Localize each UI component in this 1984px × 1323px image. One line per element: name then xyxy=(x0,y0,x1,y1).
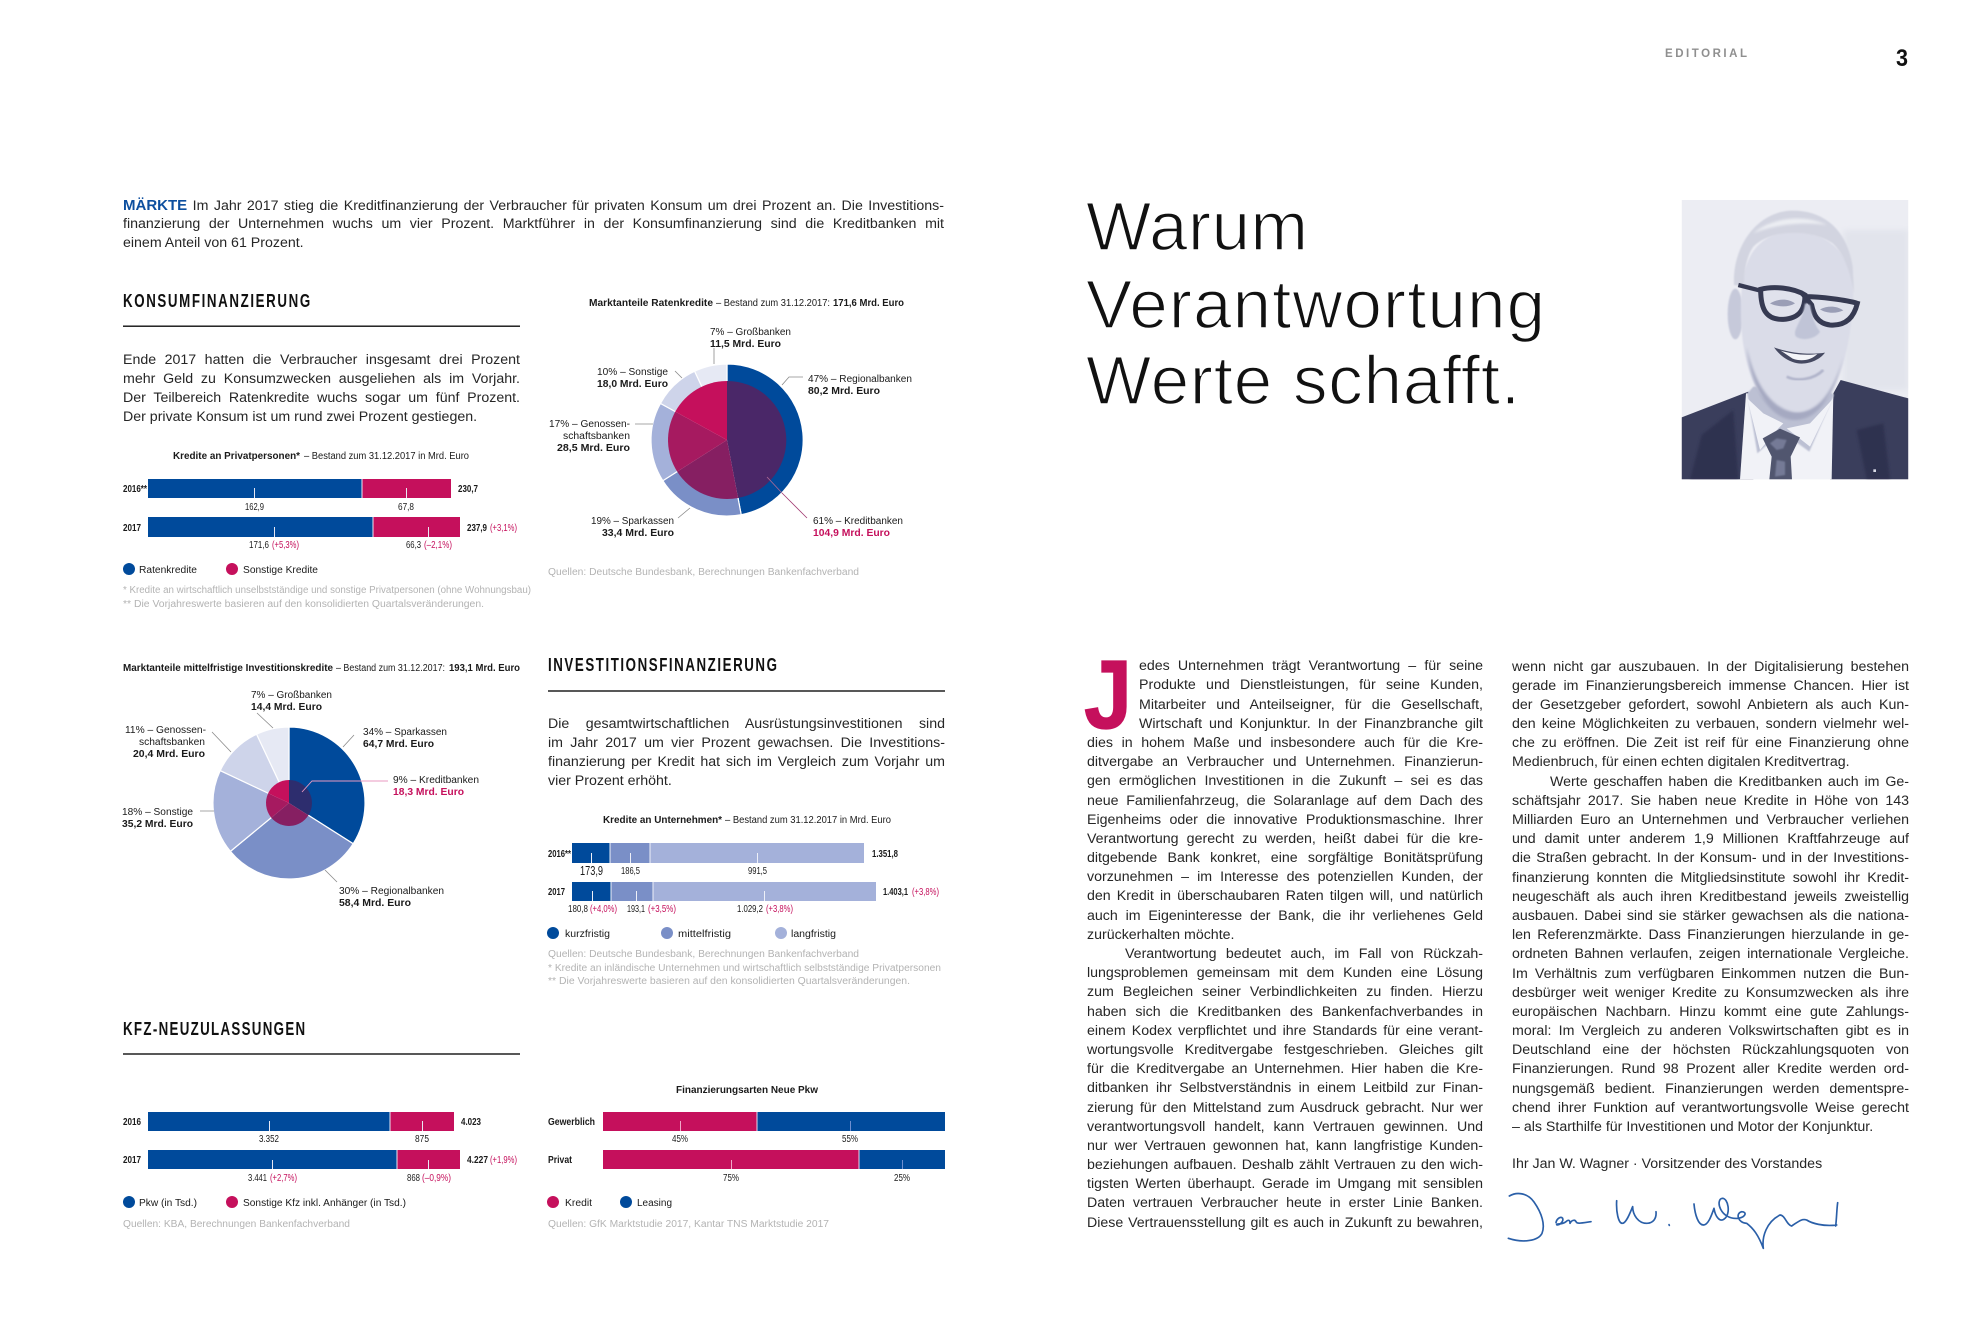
bar chart: Finanzierungsarten Neue Pkw: 75% xyxy=(723,1173,739,1184)
bar chart: Kredite an Unternehmen: (+3,8%) xyxy=(766,904,793,915)
bar chart: Kredite an Unternehmen: 173,9 xyxy=(580,864,603,878)
bar chart: Kredite an Privatpersonen: – Bestand zum 31.12.2017 in Mrd. Euro xyxy=(304,451,469,462)
pie chart: Marktanteile Ratenkredite: 61% – Kreditbanken xyxy=(813,516,903,527)
bar chart: Finanzierungsarten Neue Pkw xyxy=(547,1085,945,1230)
bar chart: Kredite an Privatpersonen: Sonstige Kredite xyxy=(243,565,318,576)
pie chart: Marktanteile mittelfristige Investitionskredite: – Bestand zum 31.12.2017: xyxy=(336,663,445,674)
bar chart: Kredite an Privatpersonen: 230,7 xyxy=(458,484,478,495)
article column 2: Werte geschaffen haben die Kreditbanken auch im Ge- xyxy=(1550,774,1909,790)
text block: Investitionsfinanzierung: finanzierung per Kredit hat sich im Vergleich zum Vorjahr um xyxy=(548,754,945,770)
pie chart: Marktanteile mittelfristige Investitionskredite: Marktanteile mittelfristige Investitionskredite xyxy=(123,663,333,674)
bar chart: Finanzierungsarten Neue Pkw: 55% xyxy=(842,1134,858,1145)
intro text: Märkte: einem Anteil von 61 Prozent. xyxy=(123,235,304,251)
article column 2: schäftsjahr 2017. Sie haben neue Kredite in Höhe von 143 xyxy=(1512,793,1909,809)
article column 2: finanzierung konnten die Mitgliedsinstitute sowohl ihr Kredit- xyxy=(1512,870,1909,886)
article column 1: lungsproblemen gemeinsam mit dem Kunden eine Lösung xyxy=(1087,965,1483,981)
intro text: Märkte: MÄRKTE Im Jahr 2017 stieg die Kreditfinanzierung der Verbraucher für privaten Konsum um drei Prozent an. Die Investitions- xyxy=(123,197,944,214)
article column 2: der Gesetzgeber gefordert, sowohl Anbietern als auch Kun- xyxy=(1512,697,1909,713)
bar chart: Kredite an Unternehmen: 2016** xyxy=(548,849,571,860)
article column 1: zurückerhalten möchte. xyxy=(1087,927,1234,943)
bar chart: Kredite an Unternehmen: 193,1 xyxy=(627,904,645,915)
bar chart: Kfz-Neuzulassungen xyxy=(123,1112,517,1230)
article column 2: len Referenzmärkte. Dass Finanzierungen hierzulande in ge- xyxy=(1512,927,1909,943)
article column 1: neue Familienfahrzeug, die Solaranlage auf dem Dach des xyxy=(1087,792,1483,808)
bar chart: Kredite an Unternehmen: – Bestand zum 31.12.2017 in Mrd. Euro xyxy=(725,815,891,826)
pie chart: Marktanteile mittelfristige Investitionskredite: 18,3 Mrd. Euro xyxy=(393,787,464,798)
bar chart: Kredite an Unternehmen: (+4,0%) xyxy=(590,904,617,915)
pie chart: Marktanteile mittelfristige Investitionskredite: schaftsbanken xyxy=(139,737,205,748)
article column 2: moral: Im Vergleich zu anderen Volkswirtschaften gibt es in xyxy=(1512,1023,1909,1039)
bar chart: Kfz-Neuzulassungen: (+1,9%) xyxy=(490,1155,517,1166)
article column 1: verantwortungsvoll handelt, kann Vertrauen gewinnen. Und xyxy=(1087,1119,1483,1135)
article column 1: vorzunehmen – im Interesse des potenziellen Kunden, der xyxy=(1087,869,1483,885)
article column 1: ditgebende Bank konkret, eine sorgfältige Bonitätsprüfung xyxy=(1087,850,1483,866)
text block: Investitionsfinanzierung: im Jahr 2017 um vier Prozent gewachsen. Die Investitions- xyxy=(548,735,945,751)
pie chart: Marktanteile Ratenkredite: 10% – Sonstige xyxy=(597,367,668,378)
bar chart: Kfz-Neuzulassungen: 3.352 xyxy=(259,1134,279,1145)
bar chart: Kredite an Unternehmen xyxy=(547,815,941,987)
article column 2: Deutschland eine der höchsten Rückzahlungsquoten von xyxy=(1512,1042,1909,1058)
pie chart: Marktanteile Ratenkredite: 7% – Großbanken xyxy=(710,327,791,338)
bar chart: Finanzierungsarten Neue Pkw: Finanzierungsarten Neue Pkw xyxy=(676,1085,818,1096)
article column 2: nungsgemäß bedient. Finanzierungen werden dementspre- xyxy=(1512,1081,1909,1097)
page header: section label: EDITORIAL xyxy=(1665,48,1747,60)
pie chart: Marktanteile Ratenkredite: Quellen: Deutsche Bundesbank, Berechnungen Bankenfachverband xyxy=(548,567,859,578)
text block: Konsumfinanzierung: mehr Geld zu Konsumzwecken ausgeliehen als im Vorjahr. xyxy=(123,371,520,387)
article column 1: Wirtschaft und Konjunktur. In der Finanzbranche gilt xyxy=(1139,716,1483,732)
bar chart: Kfz-Neuzulassungen: (+2,7%) xyxy=(270,1173,297,1184)
bar chart: Kredite an Privatpersonen: 2016** xyxy=(123,484,147,495)
article column 2: den keine Möglichkeiten zu verbauen, sondern vielmehr wel- xyxy=(1512,716,1909,732)
article column 1: Diese Vertrauensstellung gilt es auch in Zukunft zu bewahren, xyxy=(1087,1215,1483,1231)
drop cap J: J xyxy=(1084,640,1132,749)
article column 2: chend ihrer Funktion auf verantwortungsvolle Weise gerecht xyxy=(1512,1100,1909,1116)
text block: Konsumfinanzierung: Der private Konsum ist um rund zwei Prozent gestiegen. xyxy=(123,409,477,425)
article column 2: wenn nicht gar auszubauen. In der Digitalisierung bestehen xyxy=(1512,658,1909,674)
bar chart: Kredite an Privatpersonen: 67,8 xyxy=(398,502,414,513)
text block: Investitionsfinanzierung xyxy=(548,716,945,789)
bar chart: Kredite an Privatpersonen: 2017 xyxy=(123,523,141,534)
bar chart: Kredite an Privatpersonen: (+5,3%) xyxy=(272,540,299,551)
bar chart: Kredite an Unternehmen: kurzfristig xyxy=(565,929,610,940)
bar chart: Finanzierungsarten Neue Pkw: 25% xyxy=(894,1173,910,1184)
bar chart: Kredite an Unternehmen: 991,5 xyxy=(748,866,767,877)
article column 2: neugeschäft als auch ihren Kreditbestand jeweils zweistellig xyxy=(1512,889,1909,905)
text block: Konsumfinanzierung xyxy=(123,352,520,425)
article column 1: auch im Eigeninteresse der Bank, die ihr verliehenes Geld xyxy=(1087,908,1483,924)
main title: Verantwortung xyxy=(1086,266,1545,343)
bar chart: Kredite an Privatpersonen: 237,9 xyxy=(467,523,487,534)
sign-off line: Ihr Jan W. Wagner · Vorsitzender des Vorstandes xyxy=(1512,1156,1822,1172)
article column 2: und damit unter anderem 1,9 Millionen Kraftfahrzeuge auf xyxy=(1512,831,1909,847)
pie chart: Marktanteile mittelfristige Investitionskredite: 18% – Sonstige xyxy=(122,807,193,818)
article column 1: Verantwortung bedeutet auch, im Fall von Rückzah- xyxy=(1125,946,1483,962)
article column 1: Produkte und Dienstleistungen, für seine Kunden, xyxy=(1139,677,1483,693)
bar chart: Kredite an Unternehmen: 186,5 xyxy=(621,866,640,877)
bar chart: Kredite an Privatpersonen: 171,6 xyxy=(249,540,269,551)
bar chart: Kredite an Unternehmen: 180,8 xyxy=(568,904,588,915)
article column 1: einem Kodex verpflichtet und ihre Standards für eine verant- xyxy=(1087,1023,1483,1039)
article column 1: tigsten Werten überhaupt. Gerade im Umgang mit sensiblen xyxy=(1087,1176,1483,1192)
article column 1: Verantwortung gerecht zu werden, heißt dabei für die kre- xyxy=(1087,831,1483,847)
pie chart: Marktanteile mittelfristige Investitionskredite: 64,7 Mrd. Euro xyxy=(363,739,434,750)
pie chart: Marktanteile mittelfristige Investitionskredite: 58,4 Mrd. Euro xyxy=(339,898,411,909)
pie chart: Marktanteile mittelfristige Investitionskredite xyxy=(122,663,520,909)
article column 1: zierung für den Mittelstand zum Ausdruck gebracht. Nur wer xyxy=(1087,1100,1483,1116)
heading: Konsumfinanzierung: KONSUMFINANZIERUNG xyxy=(123,291,310,312)
bar chart: Kfz-Neuzulassungen: Pkw (in Tsd.) xyxy=(139,1198,197,1209)
pie chart: Marktanteile mittelfristige Investitionskredite: 193,1 Mrd. Euro xyxy=(449,663,520,674)
bar chart: Finanzierungsarten Neue Pkw: Kredit xyxy=(565,1198,592,1209)
pie chart: Marktanteile Ratenkredite: 80,2 Mrd. Euro xyxy=(808,386,880,397)
article column 1: ditvergabe an Verbraucher und Unternehmen. Finanzierun- xyxy=(1087,754,1483,770)
bar chart: Kredite an Unternehmen: (+3,5%) xyxy=(648,904,676,915)
article column 1: Daten vertrauen Verbraucher heute in erster Linie Banken. xyxy=(1087,1195,1483,1211)
bar chart: Kredite an Unternehmen: 1.029,2 xyxy=(737,904,763,915)
intro text: Märkte xyxy=(123,197,944,251)
pie chart: Marktanteile mittelfristige Investitionskredite: 14,4 Mrd. Euro xyxy=(251,702,322,713)
text block: Konsumfinanzierung: Der Teilbereich Ratenkredite wuchs sogar um fünf Prozent. xyxy=(123,390,520,406)
pie chart: Marktanteile mittelfristige Investitionskredite: 20,4 Mrd. Euro xyxy=(133,749,205,760)
bar chart: Kfz-Neuzulassungen: 2016 xyxy=(123,1117,141,1128)
portrait photo: Jan W. Wagner xyxy=(1682,200,1908,479)
bar chart: Kredite an Privatpersonen: Ratenkredite xyxy=(139,565,197,576)
bar chart: Kredite an Unternehmen: 2017 xyxy=(548,887,565,898)
page number: 3 xyxy=(1896,45,1908,72)
article column 2: – als Starthilfe für Investitionen und Motor der Konjunktur. xyxy=(1512,1119,1873,1135)
bar chart: Kredite an Privatpersonen: (–2,1%) xyxy=(424,540,452,551)
bar chart: Finanzierungsarten Neue Pkw: Leasing xyxy=(637,1198,672,1209)
article column 1: gen ermöglichen Investitionen in die Zukunft – sei es das xyxy=(1087,773,1483,789)
pie chart: Marktanteile mittelfristige Investitionskredite: 11% – Genossen- xyxy=(125,725,206,736)
article column 2: Im Verhältnis zum verfügbaren Einkommen nutzen die Bun- xyxy=(1512,966,1909,982)
pie chart: Marktanteile Ratenkredite: 17% – Genossen- xyxy=(549,419,630,430)
bar chart: Finanzierungsarten Neue Pkw: Quellen: GfK Marktstudie 2017, Kantar TNS Marktstudie 2017 xyxy=(548,1219,829,1230)
article column 2: die Straßen gebracht. In der Konsum- und in der Investitions- xyxy=(1512,850,1909,866)
pie chart: Marktanteile Ratenkredite: 11,5 Mrd. Euro xyxy=(710,339,781,350)
bar chart: Kfz-Neuzulassungen: Sonstige Kfz inkl. Anhänger (in Tsd.) xyxy=(243,1198,406,1209)
pie chart: Marktanteile Ratenkredite: 171,6 Mrd. Euro xyxy=(833,298,904,309)
article column 2: ausbauen. Dabei sind sie stärker gewachsen als die nationa- xyxy=(1512,908,1909,924)
article column 1: nur wer Vertrauen gewonnen hat, kann langfristige Kunden- xyxy=(1087,1138,1483,1154)
pie chart: Marktanteile Ratenkredite: Marktanteile Ratenkredite xyxy=(589,298,713,309)
heading: Investitionsfinanzierung: INVESTITIONSFINANZIERUNG xyxy=(548,655,777,676)
pie chart: Marktanteile Ratenkredite: – Bestand zum 31.12.2017: xyxy=(716,298,830,309)
article column 2: Finanzierungen. Rund 98 Prozent aller Kredite werden ord- xyxy=(1512,1061,1909,1077)
bar chart: Kredite an Unternehmen: langfristig xyxy=(791,929,836,940)
pie chart: Marktanteile Ratenkredite: 28,5 Mrd. Euro xyxy=(557,443,630,454)
bar chart: Finanzierungsarten Neue Pkw: Privat xyxy=(548,1155,573,1166)
signature xyxy=(1508,1194,1838,1248)
pie chart: Marktanteile Ratenkredite: schaftsbanken xyxy=(563,431,630,442)
article column 2: gerade im Finanzierungsbereich immense Chancen. Hier ist xyxy=(1512,678,1909,694)
bar chart: Kredite an Privatpersonen: 162,9 xyxy=(245,502,264,513)
bar chart: Kfz-Neuzulassungen: 868 xyxy=(407,1173,420,1184)
pie chart: Marktanteile Ratenkredite: 47% – Regionalbanken xyxy=(808,374,912,385)
article column 2: ordneten Bahnen verlaufen, zeigen internationale Vergleiche. xyxy=(1512,946,1909,962)
article column 1: haben sich die Kreditbanken des Bankenfachverbandes in xyxy=(1087,1004,1483,1020)
bar chart: Kredite an Unternehmen: mittelfristig xyxy=(678,929,731,940)
bar chart: Kredite an Privatpersonen xyxy=(123,451,531,610)
bar chart: Kredite an Privatpersonen: ** Die Vorjahreswerte basieren auf den konsolidierten Quartalsveränderungen. xyxy=(123,599,484,610)
article column 1: Mitarbeiter und Anteilseigner, für die Gesellschaft, xyxy=(1139,697,1483,713)
bar chart: Kfz-Neuzulassungen: 4.023 xyxy=(461,1117,481,1128)
pie chart: Marktanteile mittelfristige Investitionskredite: 7% – Großbanken xyxy=(251,690,332,701)
article column 1: den Kredit in überschaubaren Raten tilgen will, und natürlich xyxy=(1087,888,1483,904)
main title: Warum xyxy=(1086,188,1308,265)
bar chart: Kfz-Neuzulassungen: Quellen: KBA, Berechnungen Bankenfachverband xyxy=(123,1219,350,1230)
pie chart: Marktanteile mittelfristige Investitionskredite: 35,2 Mrd. Euro xyxy=(122,819,193,830)
bar chart: Kfz-Neuzulassungen: 3.441 xyxy=(248,1173,267,1184)
bar chart: Kfz-Neuzulassungen: 2017 xyxy=(123,1155,141,1166)
pie chart: Marktanteile mittelfristige Investitionskredite: 30% – Regionalbanken xyxy=(339,886,444,897)
text block: Konsumfinanzierung: Ende 2017 hatten die Verbraucher insgesamt drei Prozent xyxy=(123,352,520,368)
article column 2 xyxy=(1512,658,1909,1135)
text block: Investitionsfinanzierung: Die gesamtwirtschaftlichen Ausrüstungsinvestitionen sind xyxy=(548,716,945,732)
article column 2: europäischen Nachbarn. Hinzu kommt eine gute Zahlungs- xyxy=(1512,1004,1909,1020)
bar chart: Kredite an Unternehmen: * Kredite an inländische Unternehmen und wirtschaftlich selbstständige Privatpersonen xyxy=(548,963,941,974)
article column 2: che zu eröffnen. Die Zeit ist reif für eine Finanzierung ohne xyxy=(1512,735,1909,751)
article column 1: beziehungen aufbauen. Deshalb zählt Vertrauen zu den wich- xyxy=(1087,1157,1483,1173)
article column 1: Eigenheims oder die innovative Produktionsmaschine. Ihrer xyxy=(1087,812,1483,828)
article column 1: ditbanken ihr Selbstverständnis in einem Leitbild zur Finan- xyxy=(1087,1080,1483,1096)
article column 2: Medienbruch, für einen echten digitalen Kreditvertrag. xyxy=(1512,754,1850,770)
pie chart: Marktanteile Ratenkredite: 33,4 Mrd. Euro xyxy=(602,528,674,539)
intro text: Märkte: finanzierung der Unternehmen wuchs um vier Prozent. Marktführer in der Konsumfinanzierung sind die Kreditbanken mit xyxy=(123,216,944,232)
main title: Werte schafft. xyxy=(1086,342,1520,419)
pie chart: Marktanteile mittelfristige Investitionskredite: 34% – Sparkassen xyxy=(363,727,447,738)
article column 1: dies in hohem Maße und insbesondere auch für die Kre- xyxy=(1087,735,1483,751)
bar chart: Kfz-Neuzulassungen: 875 xyxy=(415,1134,429,1145)
pie chart: Marktanteile Ratenkredite xyxy=(548,298,912,578)
article column 1: zum Begleichen seiner Verbindlichkeiten zu finden. Hierzu xyxy=(1087,984,1483,1000)
bar chart: Kredite an Unternehmen: Quellen: Deutsche Bundesbank, Berechnungen Bankenfachverband xyxy=(548,949,859,960)
bar chart: Kredite an Privatpersonen: (+3,1%) xyxy=(490,523,517,534)
pie chart: Marktanteile mittelfristige Investitionskredite: 9% – Kreditbanken xyxy=(393,775,479,786)
bar chart: Kredite an Unternehmen: ** Die Vorjahreswerte basieren auf den konsolidierten Quartalsveränderungen. xyxy=(548,976,910,987)
heading: Kfz-Neuzulassungen: KFZ-NEUZULASSUNGEN xyxy=(123,1019,305,1040)
article column 1: wortungsvolle Kreditvergabe festgeschrieben. Gleiches gilt xyxy=(1087,1042,1483,1058)
article column 1: für die Kreditvergabe an Unternehmen. Hier haben die Kre- xyxy=(1087,1061,1483,1077)
bar chart: Kredite an Privatpersonen: 66,3 xyxy=(406,540,421,551)
bar chart: Kfz-Neuzulassungen: 4.227 xyxy=(467,1155,488,1166)
pie chart: Marktanteile Ratenkredite: 19% – Sparkassen xyxy=(591,516,674,527)
bar chart: Kfz-Neuzulassungen: (–0,9%) xyxy=(422,1173,451,1184)
bar chart: Kredite an Unternehmen: Kredite an Unternehmen* xyxy=(603,815,722,826)
bar chart: Kredite an Unternehmen: (+3,8%) xyxy=(912,887,939,898)
pie chart: Marktanteile Ratenkredite: 104,9 Mrd. Euro xyxy=(813,528,890,539)
article column 2: desbürger weit weniger Kredite zu Konsumzwecken als ihre xyxy=(1512,985,1909,1001)
bar chart: Kredite an Unternehmen: 1.403,1 xyxy=(883,887,908,898)
bar chart: Finanzierungsarten Neue Pkw: 45% xyxy=(672,1134,688,1145)
article column 1 xyxy=(1087,658,1483,1231)
bar chart: Kredite an Unternehmen: 1.351,8 xyxy=(872,849,898,860)
bar chart: Kredite an Privatpersonen: Kredite an Privatpersonen* xyxy=(173,451,300,462)
main title xyxy=(1086,188,1545,419)
pie chart: Marktanteile Ratenkredite: 18,0 Mrd. Euro xyxy=(597,379,668,390)
bar chart: Finanzierungsarten Neue Pkw: Gewerblich xyxy=(548,1117,595,1128)
bar chart: Kredite an Privatpersonen: * Kredite an wirtschaftlich unselbstständige und sonstige Privatpersonen (ohne Wohnungsbau) xyxy=(123,585,531,596)
article column 2: Milliarden Euro an Unternehmen und Verbraucher verliehen xyxy=(1512,812,1909,828)
text block: Investitionsfinanzierung: vier Prozent erhöht. xyxy=(548,773,672,789)
article column 1: edes Unternehmen trägt Verantwortung – für seine xyxy=(1139,658,1483,674)
